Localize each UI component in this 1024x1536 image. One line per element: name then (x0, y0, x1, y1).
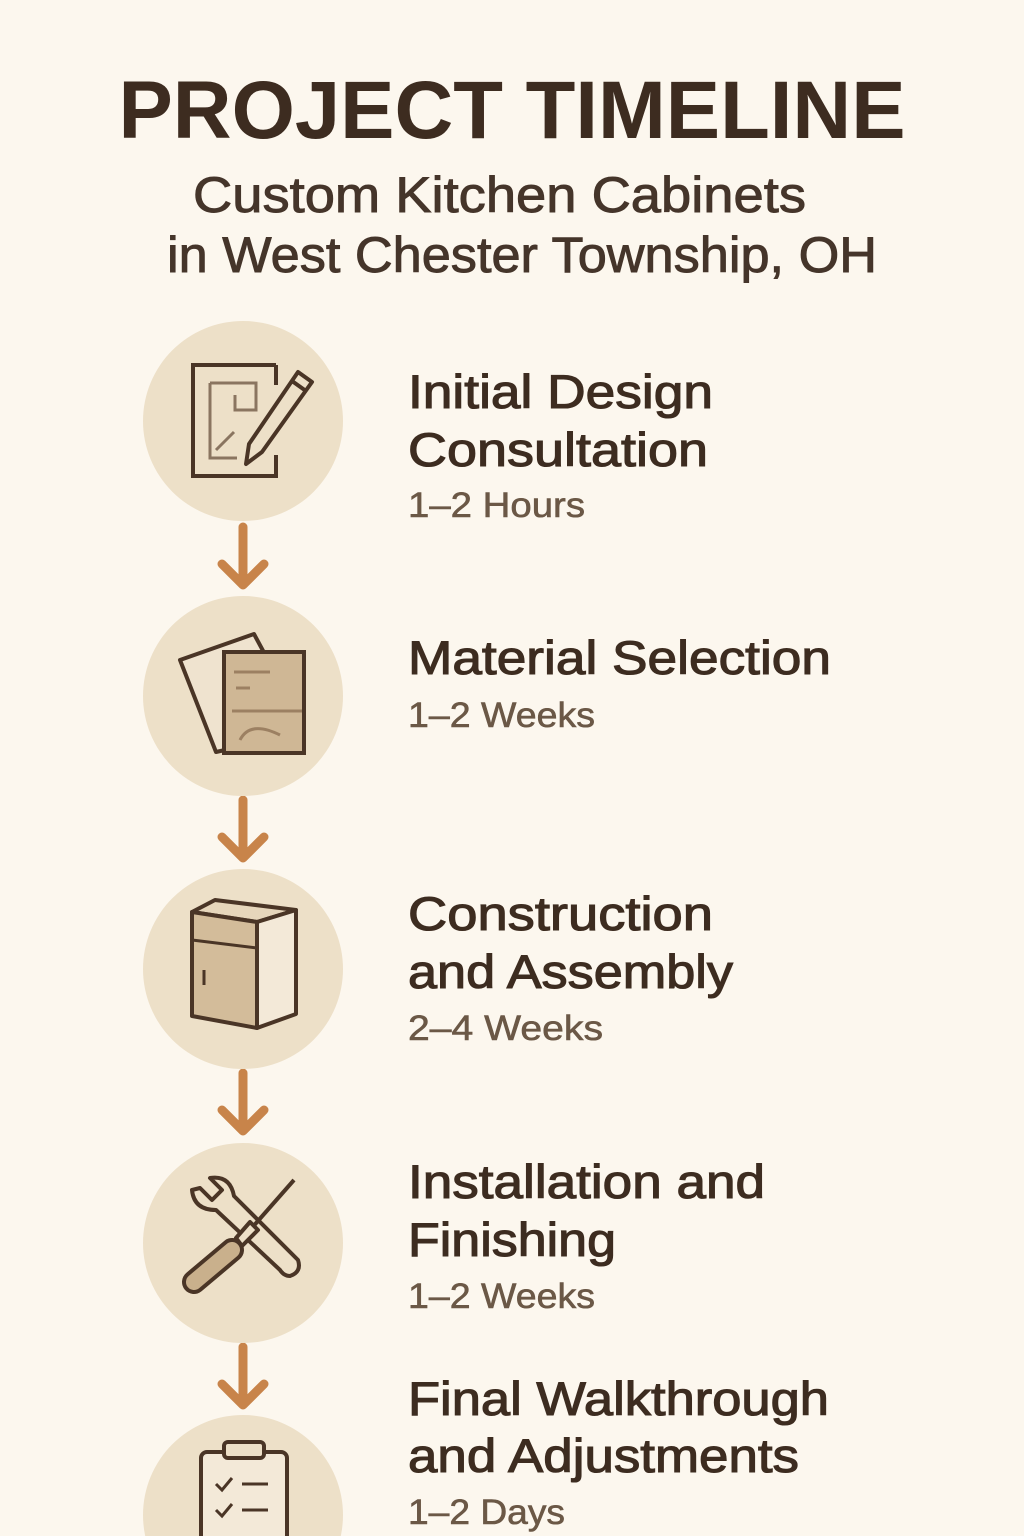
subtitle: in West Chester Township, OH (167, 227, 877, 283)
step 5: Final Walkthrough and Adjustments: Final Walkthrough (408, 1372, 829, 1425)
step 4: Installation and Finishing: Installation and (408, 1155, 765, 1208)
step 3: Construction and Assembly: and Assembly (408, 945, 734, 998)
step 1: Initial Design Consultation: Initial Design (408, 365, 713, 418)
step 4: Installation and Finishing: 1–2 Weeks (408, 1277, 595, 1316)
step 1: Initial Design Consultation (143, 321, 713, 525)
icon: wood samples (143, 596, 343, 796)
title: PROJECT TIMELINE (118, 65, 906, 156)
step 5: Final Walkthrough and Adjustments (143, 1372, 829, 1536)
step 2: Material Selection: 1–2 Weeks (408, 696, 595, 735)
step 3: Construction and Assembly (143, 869, 734, 1069)
step 3: Construction and Assembly: 2–4 Weeks (408, 1009, 603, 1048)
arrows (222, 527, 264, 1405)
icon: cabinet box (143, 869, 343, 1069)
icon: blueprint and pencil (143, 321, 343, 521)
step 5: Final Walkthrough and Adjustments: and Adjustments (408, 1429, 799, 1482)
step 1: Initial Design Consultation: Consultation (408, 423, 708, 476)
subtitle (167, 167, 877, 283)
step 2: Material Selection (143, 596, 831, 796)
subtitle: Custom Kitchen Cabinets (193, 167, 806, 223)
step 2: Material Selection: Material Selection (408, 631, 831, 684)
step 4: Installation and Finishing (143, 1143, 765, 1343)
step 4: Installation and Finishing: Finishing (408, 1213, 616, 1266)
icon: clipboard checklist (143, 1415, 343, 1536)
step 1: Initial Design Consultation: 1–2 Hours (408, 486, 585, 525)
icon: wrench and screwdriver (143, 1143, 343, 1343)
step 3: Construction and Assembly: Construction (408, 887, 713, 940)
step 5: Final Walkthrough and Adjustments: 1–2 Days (408, 1493, 565, 1532)
